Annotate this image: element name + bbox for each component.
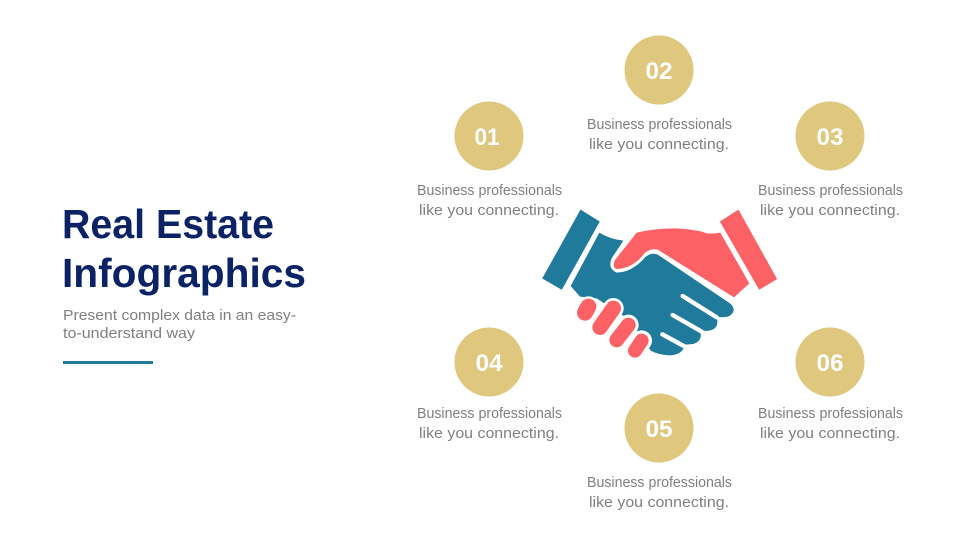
text 03: Business professionals — [758, 182, 903, 199]
text 05: Business professionals — [587, 474, 732, 491]
badge 06: 06 — [816, 350, 844, 377]
item 04 — [417, 328, 562, 442]
badge 05 — [624, 394, 694, 462]
title: Real Estate — [62, 201, 274, 247]
badge 06 — [796, 328, 864, 396]
subtitle text — [63, 307, 296, 342]
text 01: Business professionals — [417, 182, 562, 199]
red hand — [614, 228, 749, 297]
subtitle text: Present complex data in an easy- — [63, 307, 296, 324]
text 03: like you connecting. — [760, 202, 900, 219]
finger outlines — [585, 307, 642, 351]
text 02 — [587, 116, 732, 153]
blue cuff — [543, 210, 599, 289]
badge 04: 04 — [476, 350, 503, 377]
text 06: like you connecting. — [760, 425, 900, 442]
text 03 — [758, 182, 903, 219]
text 04: like you connecting. — [419, 425, 559, 442]
item 02 — [587, 36, 732, 153]
badge 04 — [454, 328, 524, 396]
red cuff — [720, 210, 777, 289]
text 04 — [417, 405, 562, 442]
text 02: like you connecting. — [589, 136, 729, 153]
item 01 — [417, 102, 562, 219]
title: Infographics — [62, 250, 306, 296]
accent underline — [63, 361, 153, 364]
badge 03 — [796, 102, 864, 170]
text 02: Business professionals — [587, 116, 732, 133]
item 03 — [758, 102, 903, 219]
text 05: like you connecting. — [589, 494, 729, 511]
badge 02: 02 — [646, 58, 672, 85]
text 06 — [758, 405, 903, 442]
text 01: like you connecting. — [419, 202, 559, 219]
item 05 — [587, 394, 732, 511]
finger gaps — [662, 296, 717, 347]
text 01 — [417, 182, 562, 219]
text 04: Business professionals — [417, 405, 562, 422]
badge 02 — [624, 36, 694, 104]
item 06 — [758, 328, 903, 442]
badge 01: 01 — [474, 124, 500, 151]
text 05 — [587, 474, 732, 511]
subtitle text: to-understand way — [63, 325, 196, 342]
text 06: Business professionals — [758, 405, 903, 422]
badge 03: 03 — [816, 124, 844, 151]
icon: handshake — [543, 210, 777, 355]
badge 05: 05 — [646, 416, 672, 443]
red fingers — [585, 307, 642, 351]
title — [62, 201, 306, 296]
badge 01 — [454, 102, 524, 170]
blue hand — [571, 233, 734, 355]
